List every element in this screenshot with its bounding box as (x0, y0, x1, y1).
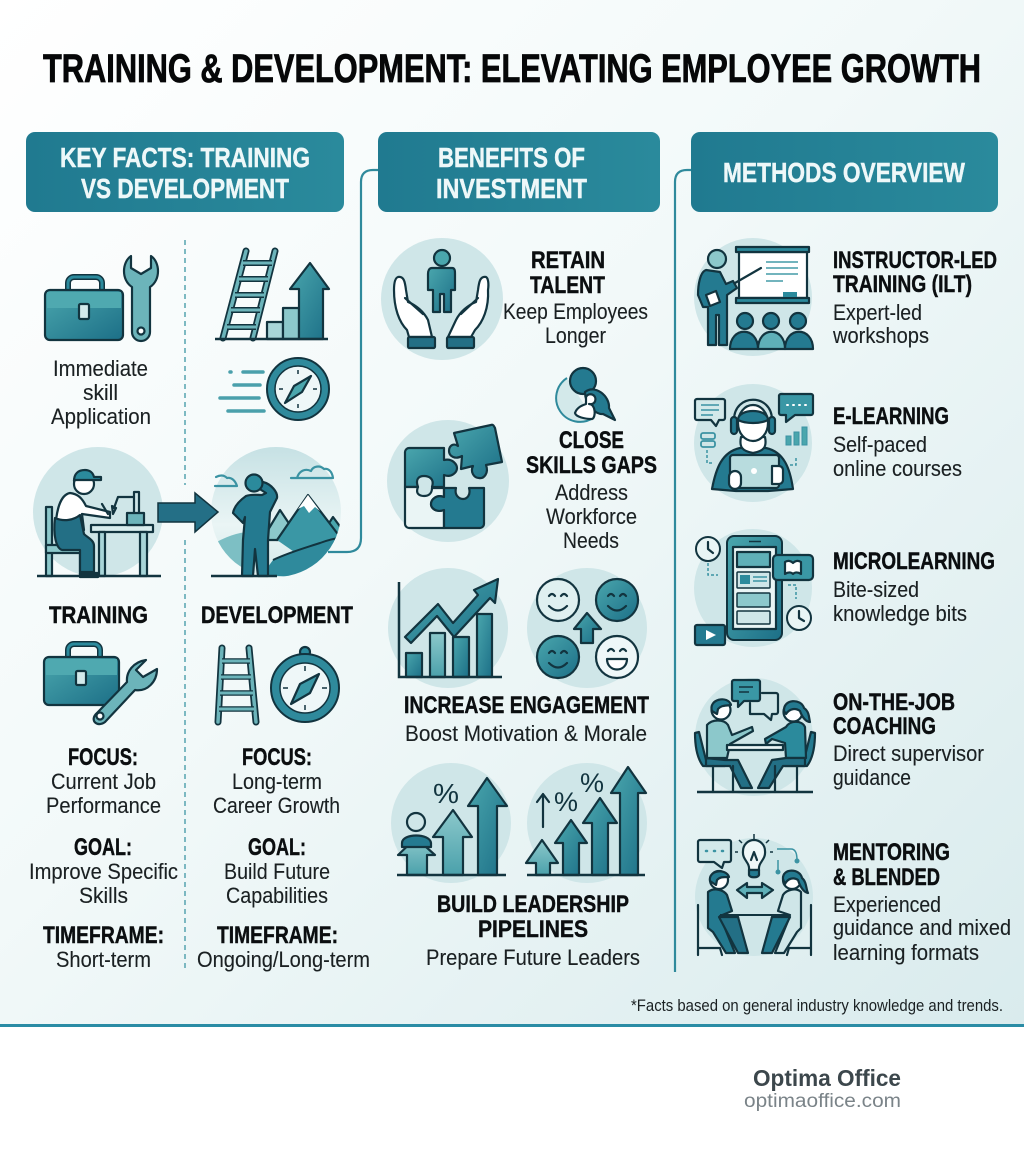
heading: methods overview (691, 132, 998, 212)
text: increase engagement: INCREASE ENGAGEMENT (404, 692, 649, 719)
text: increase engagement (404, 692, 649, 746)
text: on-the-job coaching: guidance (833, 765, 911, 790)
text: instructor-led training (832, 247, 997, 348)
icon: microlearning phone (694, 529, 813, 647)
connector: development to benefits (328, 170, 378, 552)
development facts (197, 744, 370, 972)
text: build leadership pipelines: Prepare Future Leaders (426, 945, 640, 970)
text: e-learning: Self-paced (833, 432, 927, 457)
text: close skills gaps: Address (555, 480, 628, 505)
development facts: Ongoing/Long-term (197, 947, 370, 972)
text: mentoring and blended: learning formats (833, 940, 979, 965)
icon: training scene, worker at bench (33, 447, 163, 577)
training facts: Improve Specific (29, 859, 178, 884)
icon: growing arrows with percentages (526, 763, 647, 883)
text: microlearning (833, 548, 995, 626)
heading: key facts: VS DEVELOPMENT (81, 173, 289, 204)
development facts: FOCUS: (242, 744, 312, 771)
text: retain talent (503, 247, 648, 348)
text: microlearning: knowledge bits (833, 601, 967, 626)
brand: optima office: Optima Office (753, 1065, 901, 1091)
text: close skills gaps: Workforce (546, 504, 637, 529)
heading: benefits of investment (378, 132, 660, 212)
heading: benefits of investment: BENEFITS OF (438, 142, 585, 173)
text: immediate skill application: skill (83, 380, 118, 405)
heading: development: DEVELOPMENT (201, 602, 353, 629)
text: build leadership pipelines (426, 891, 640, 970)
development facts: Career Growth (213, 793, 340, 818)
training facts: GOAL: (74, 834, 132, 861)
heading: key facts: KEY FACTS: TRAINING (60, 142, 310, 173)
text: e-learning: E-LEARNING (833, 403, 949, 430)
text: retain talent: Longer (545, 323, 606, 348)
icon: puzzle pieces (387, 420, 509, 542)
icon: development scene, person viewing mountains (211, 447, 350, 580)
icon: growing arrows with percentages: % (554, 787, 578, 817)
icon: coaching conversation (695, 678, 815, 796)
text: instructor-led training: Expert-led (833, 300, 922, 325)
icon: growing arrows with percentages: % (580, 768, 604, 798)
icon: compass with speed lines (220, 358, 329, 420)
development facts: GOAL: (248, 834, 306, 861)
text: instructor-led training: workshops (832, 323, 929, 348)
bottom rule (0, 1024, 1024, 1027)
icon: hands holding person (381, 238, 503, 360)
training facts: Short-term (56, 947, 151, 972)
text: on-the-job coaching: COACHING (833, 713, 936, 740)
panel: methods overview (691, 132, 1011, 965)
training facts (29, 744, 178, 972)
icon: rising bar chart (388, 568, 508, 688)
brand: optima office: optimaoffice.com (744, 1091, 901, 1112)
text: increase engagement: Boost Motivation & Morale (405, 721, 647, 746)
icon: leadership arrows with person: % (433, 778, 459, 809)
text: mentoring and blended: & BLENDED (833, 864, 940, 891)
icon: toolbox and wrench (45, 256, 158, 341)
text: build leadership pipelines: BUILD LEADERSHIP (437, 891, 629, 918)
icon: leadership arrows with person (391, 763, 511, 883)
text: close skills gaps (526, 427, 657, 553)
training facts: Performance (46, 793, 161, 818)
heading: methods overview: METHODS OVERVIEW (723, 157, 965, 188)
heading: training: TRAINING (49, 602, 148, 629)
icon: speech bubbles (556, 368, 615, 422)
icon: mentoring pair with lightbulb (695, 834, 813, 956)
icon: instructor at whiteboard (694, 238, 813, 356)
text: build leadership pipelines: PIPELINES (478, 916, 588, 943)
training facts: Current Job (51, 769, 156, 794)
text: immediate skill application (51, 356, 151, 429)
text: on-the-job coaching: Direct supervisor (833, 741, 984, 766)
training facts: Skills (79, 883, 128, 908)
text: on-the-job coaching: ON-THE-JOB (833, 689, 955, 716)
panel: key facts (26, 132, 370, 972)
icon: smiley faces (527, 568, 647, 688)
text: mentoring and blended: Experienced (833, 892, 941, 917)
heading: key facts (26, 132, 344, 212)
arrow: training to development (158, 493, 218, 532)
icon: ladder and growth arrow (215, 251, 329, 339)
text: mentoring and blended (833, 839, 1011, 965)
icon: toolbox and diagonal wrench (44, 644, 157, 724)
text: instructor-led training: TRAINING (ILT) (833, 271, 972, 298)
brand: optima office (744, 1065, 901, 1112)
text: immediate skill application: Immediate (53, 356, 148, 381)
development facts: Capabilities (226, 883, 328, 908)
text: close skills gaps: SKILLS GAPS (526, 452, 657, 479)
panel: benefits of investment (378, 132, 660, 970)
text: e-learning: online courses (833, 456, 962, 481)
development facts: Long-term (232, 769, 322, 794)
training facts: FOCUS: (68, 744, 138, 771)
text: retain talent: Keep Employees (503, 299, 648, 324)
icon: e-learning person with tablet (694, 384, 813, 502)
heading: benefits of investment: INVESTMENT (436, 173, 587, 204)
development facts: TIMEFRAME: (217, 922, 338, 949)
text: retain talent: RETAIN (531, 247, 605, 274)
text: e-learning (833, 403, 962, 481)
training facts: TIMEFRAME: (43, 922, 164, 949)
icon: ladder and compass (218, 647, 339, 722)
development facts: Build Future (224, 859, 330, 884)
text: mentoring and blended: MENTORING (833, 839, 950, 866)
text: microlearning: Bite-sized (833, 577, 919, 602)
divider between training and development (184, 240, 186, 972)
text: on-the-job coaching (833, 689, 984, 790)
connector: benefits to methods (675, 170, 691, 972)
text: close skills gaps: CLOSE (559, 427, 624, 454)
text: close skills gaps: Needs (563, 528, 619, 553)
text: immediate skill application: Application (51, 404, 151, 429)
text: retain talent: TALENT (530, 272, 605, 299)
